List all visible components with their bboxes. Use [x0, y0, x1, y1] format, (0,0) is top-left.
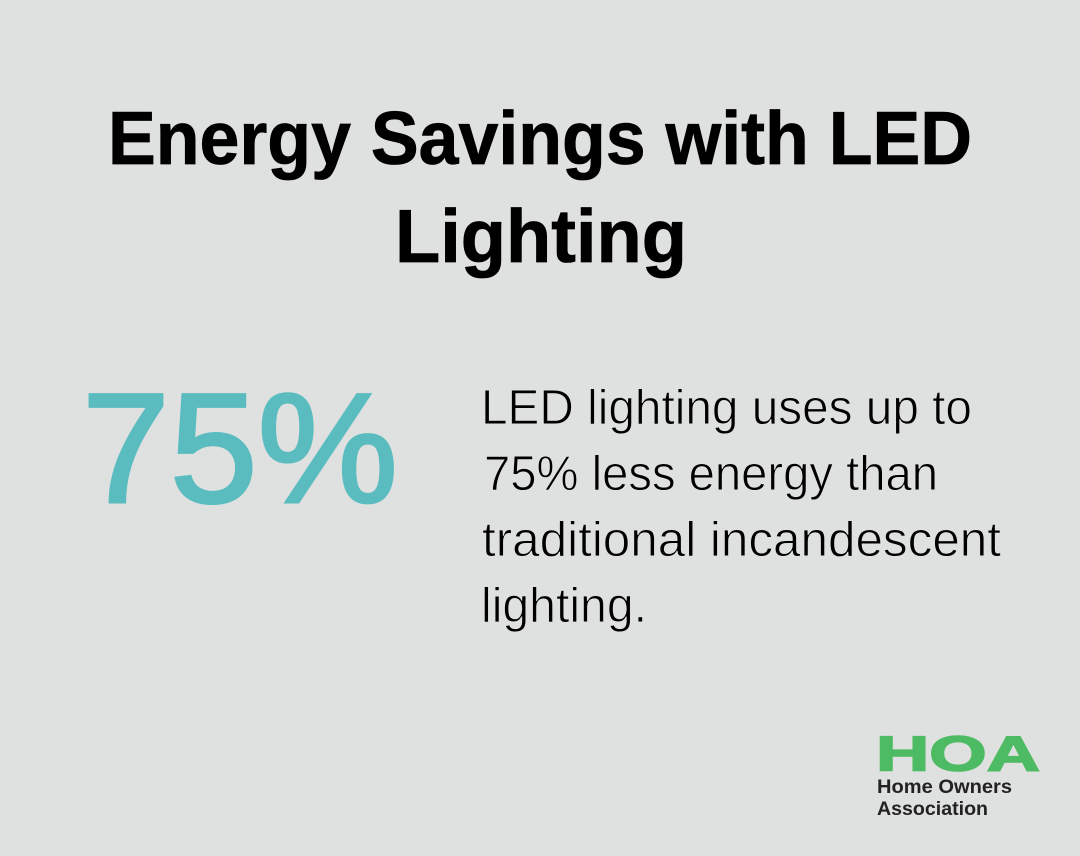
big statistic: 75%: 75%	[82, 362, 398, 536]
logo: HOA Home Owners Association: Association	[877, 799, 988, 820]
description text: LED lighting uses up to	[481, 381, 972, 435]
title: Lighting	[395, 194, 687, 278]
logo: HOA Home Owners Association: HOA	[876, 728, 1040, 782]
description text: traditional incandescent	[482, 513, 1001, 567]
title: Energy Savings with LED	[108, 96, 972, 180]
logo: HOA Home Owners Association: Home Owners	[877, 777, 1012, 798]
description text: lighting.	[481, 579, 647, 633]
description text: 75% less energy than	[484, 447, 938, 501]
description text	[481, 381, 1001, 633]
logo: HOA Home Owners Association	[876, 728, 1040, 820]
title	[108, 96, 972, 278]
